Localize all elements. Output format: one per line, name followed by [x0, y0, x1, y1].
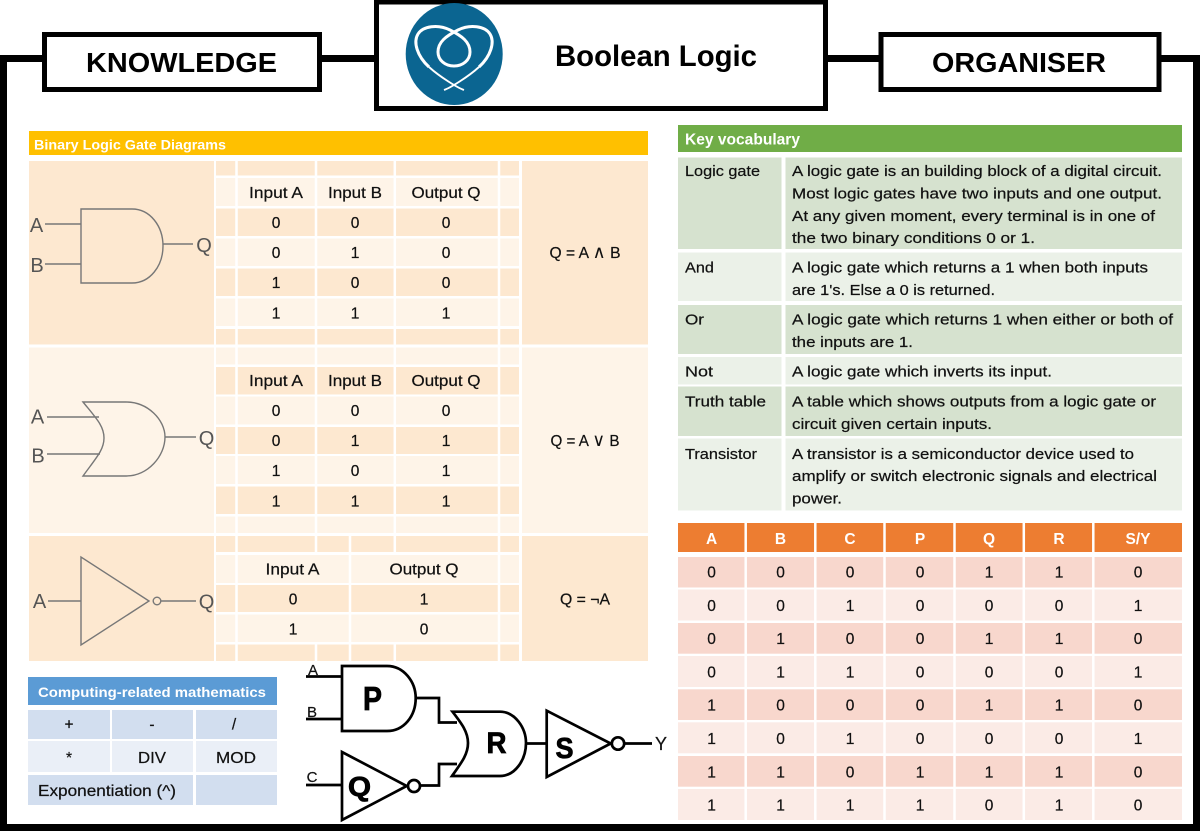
circuit diagram: S: [556, 733, 574, 765]
AND truth table: [216, 161, 519, 345]
title box: ORGANISER: [881, 34, 1159, 90]
heading: computing-related mathematics: Computing-related mathematics: [38, 684, 266, 700]
OR truth table: Input B: [328, 373, 382, 390]
truth table body: 1: [916, 764, 924, 782]
OR truth table: 1: [442, 494, 450, 510]
truth table body: 1: [846, 664, 854, 682]
term: or: the inputs are 1.: [792, 334, 913, 351]
title box: KNOWLEDGE: KNOWLEDGE: [86, 47, 277, 78]
row: NOT gate: [29, 536, 648, 661]
truth table body: 0: [776, 564, 785, 582]
truth table body: 1: [985, 698, 993, 714]
truth table body: 0: [846, 631, 855, 648]
AND truth table: 0: [351, 275, 360, 292]
truth table body: 1: [985, 631, 993, 648]
truth table body: 0: [846, 764, 855, 782]
truth table body: 1: [1055, 764, 1063, 782]
truth table body: 1: [776, 664, 785, 682]
AND truth table: 0: [442, 245, 451, 262]
OR truth table: 0: [272, 403, 281, 420]
AND truth table: 0: [351, 215, 360, 232]
icon: AND gate diagram: [30, 209, 212, 283]
OR truth table: 1: [272, 494, 280, 510]
truth table header row: R: [1053, 531, 1065, 548]
circuit diagram: C: [307, 769, 318, 786]
icon: OR gate diagram: [31, 402, 214, 476]
truth table body: 1: [707, 798, 716, 814]
truth table body: 0: [776, 598, 785, 615]
truth table body: 0: [1134, 631, 1143, 648]
truth table body: 1: [1055, 698, 1063, 714]
OR truth table: 0: [272, 433, 281, 450]
truth table body: 1: [846, 798, 854, 814]
icon: AND gate diagram: A: [30, 215, 44, 237]
term: transistor: power.: [792, 490, 842, 508]
term: truth table: Truth table: [685, 394, 766, 410]
truth table body: 1: [707, 764, 716, 782]
NOT truth table: Input A: [266, 562, 320, 578]
panel: computing-related mathematics: [28, 677, 277, 805]
truth table body: 0: [1134, 798, 1143, 814]
OR truth table: Input A: [249, 373, 304, 390]
operators grid: *: [66, 750, 72, 767]
formula: AND: Q = A ∧ B: [550, 242, 620, 262]
term: and: A logic gate which returns a 1 when both inputs: [792, 260, 1148, 276]
truth table body: 1: [1134, 598, 1142, 615]
icon: AND gate diagram: B: [30, 255, 44, 277]
OR truth table: 1: [351, 433, 359, 450]
term: transistor: amplify or switch electronic signals and electrical: [792, 468, 1157, 485]
icon: OR gate diagram: B: [31, 446, 45, 468]
AND truth table: 0: [442, 275, 451, 292]
term: transistor: A transistor is a semiconductor device used to: [792, 446, 1134, 463]
truth table body: 1: [985, 564, 993, 582]
OR truth table: Output Q: [412, 373, 480, 390]
truth table header row: A: [706, 531, 717, 548]
term: truth table: A table which shows outputs from a logic gate or: [792, 394, 1156, 410]
heading: binary logic gate diagrams: [29, 131, 648, 155]
truth table body: 1: [846, 598, 854, 615]
panel: key vocabulary: [678, 125, 1182, 510]
OR truth table: 1: [351, 494, 359, 510]
truth table body: 1: [707, 698, 716, 714]
main heading: Boolean Logic: [555, 40, 757, 73]
truth table body: 0: [1055, 664, 1064, 682]
truth table body: 1: [916, 798, 924, 814]
truth table body: 1: [776, 798, 785, 814]
truth table header row: Q: [983, 531, 995, 548]
truth table body: 0: [776, 731, 785, 748]
truth table body: 1: [1134, 731, 1142, 748]
truth table body: 0: [985, 731, 994, 748]
AND truth table: Input B: [328, 185, 382, 202]
truth table body: 1: [776, 631, 785, 648]
operators grid: Exponentiation (^): [38, 783, 176, 800]
panel: binary logic gate diagrams: [29, 131, 648, 661]
truth table header row: [678, 523, 1182, 552]
truth table body: 1: [846, 731, 854, 748]
NOT truth table: 1: [289, 622, 297, 638]
NOT truth table: Output Q: [390, 562, 458, 578]
term: logic gate: Logic gate: [685, 163, 760, 180]
term: logic gate: Most logic gates have two inputs and one output.: [792, 186, 1162, 202]
term: not: A logic gate which inverts its input.: [792, 364, 1052, 380]
term: logic gate: At any given moment, every terminal is in one of: [792, 208, 1156, 225]
OR truth table: 0: [351, 403, 360, 420]
title box: KNOWLEDGE: [44, 34, 320, 90]
circuit diagram: Y: [655, 734, 667, 754]
truth table body: 1: [707, 731, 716, 748]
truth table body: 0: [1055, 731, 1064, 748]
heading: key vocabulary: [678, 125, 1182, 152]
heading: binary logic gate diagrams: Binary Logic Gate Diagrams: [34, 136, 226, 152]
term: not: Not: [685, 364, 714, 380]
term: and: [678, 252, 1182, 301]
term: and: And: [685, 260, 714, 276]
AND truth table: 0: [272, 245, 281, 262]
truth table body: 0: [916, 598, 925, 615]
operators grid: /: [232, 716, 237, 734]
icon: NOT gate diagram: Q: [199, 592, 214, 614]
operators grid: +: [64, 716, 74, 734]
panel: circuit truth table: [678, 523, 1182, 820]
heading: key vocabulary: Key vocabulary: [685, 132, 800, 148]
truth table body: 0: [1134, 764, 1143, 782]
title box: Boolean Logic: [376, 2, 826, 108]
truth table body: 0: [707, 664, 716, 682]
term: or: [678, 305, 1182, 354]
row: AND gate: [29, 161, 648, 345]
truth table body: 0: [916, 564, 925, 582]
AND truth table: 0: [272, 215, 281, 232]
term: logic gate: the two binary conditions 0 or 1.: [792, 230, 1035, 247]
icon: NOT gate diagram: A: [33, 591, 47, 613]
circuit diagram: A: [308, 662, 318, 679]
truth table body: 0: [916, 631, 925, 648]
operators grid: [28, 710, 277, 805]
formula: NOT: Q = ¬A: [560, 592, 611, 608]
AND truth table: 1: [351, 306, 359, 322]
OR truth table: 0: [351, 463, 360, 480]
AND truth table: 1: [442, 306, 450, 322]
term: logic gate: A logic gate is an building block of a digital circuit.: [792, 163, 1162, 180]
title box: ORGANISER: ORGANISER: [932, 47, 1106, 78]
OR truth table: 0: [442, 403, 451, 420]
truth table body: 0: [985, 664, 994, 682]
circuit diagram: B: [307, 704, 317, 721]
term: truth table: [678, 386, 1182, 436]
truth table header row: B: [775, 531, 786, 548]
truth table body: 0: [985, 798, 994, 814]
truth table body: 0: [1134, 564, 1143, 582]
AND truth table: Input A: [249, 185, 304, 202]
icon: OR gate diagram: A: [31, 406, 45, 428]
term: or: Or: [685, 312, 704, 328]
truth table header row: P: [915, 531, 925, 548]
circuit diagram: [306, 662, 667, 820]
OR truth table: 1: [442, 463, 450, 480]
term: transistor: [678, 438, 1182, 510]
icon: OR gate diagram: Q: [199, 428, 214, 450]
term: logic gate: [678, 158, 1182, 249]
operators grid: MOD: [216, 750, 256, 767]
OR truth table: [216, 347, 519, 533]
truth table body: 0: [707, 564, 716, 582]
truth table body: 0: [916, 664, 925, 682]
operators grid: DIV: [138, 750, 167, 767]
truth table body: 1: [776, 764, 785, 782]
AND truth table: 1: [351, 245, 359, 262]
truth table body: 0: [846, 564, 855, 582]
truth table body: 0: [1055, 598, 1064, 615]
truth table body: [678, 523, 1182, 820]
circuit diagram: Q: [348, 771, 371, 802]
AND truth table: 1: [272, 306, 280, 322]
OR truth table: 1: [442, 433, 450, 450]
truth table body: 1: [985, 764, 993, 782]
operators grid: -: [149, 716, 155, 734]
icon: NOT gate diagram: [33, 557, 214, 645]
truth table body: 1: [1055, 564, 1063, 582]
truth table body: 0: [985, 598, 994, 615]
truth table body: 1: [1055, 798, 1063, 814]
formula: OR: Q = A ∨ B: [550, 430, 620, 450]
truth table body: 1: [1134, 664, 1142, 682]
AND truth table: Output Q: [412, 185, 480, 202]
heading: computing-related mathematics: [28, 677, 277, 705]
row: OR gate: [29, 347, 648, 533]
icon: AND gate diagram: Q: [196, 235, 212, 257]
truth table body: 0: [707, 598, 716, 615]
AND truth table: 1: [272, 275, 280, 292]
truth table body: 0: [707, 631, 716, 648]
term: transistor: Transistor: [685, 446, 757, 463]
NOT truth table: 0: [289, 592, 298, 608]
AND truth table: 0: [442, 215, 451, 232]
truth table body: 0: [1134, 698, 1143, 714]
truth table body: 0: [916, 698, 925, 714]
icon: school logo: [406, 3, 503, 105]
term: and: are 1's. Else a 0 is returned.: [792, 282, 995, 299]
truth table body: 0: [776, 698, 785, 714]
truth table header row: S/Y: [1126, 531, 1151, 548]
circuit diagram: P: [363, 680, 382, 717]
truth table body: 0: [916, 731, 925, 748]
NOT truth table: [216, 536, 519, 661]
NOT truth table: 1: [420, 592, 428, 608]
circuit diagram: R: [486, 727, 507, 760]
truth table body: 0: [846, 698, 855, 714]
term: or: A logic gate which returns 1 when either or both of: [792, 312, 1174, 328]
OR truth table: 1: [272, 463, 280, 480]
NOT truth table: 0: [420, 622, 429, 638]
truth table header row: C: [844, 531, 856, 548]
term: not: [678, 357, 1182, 384]
truth table body: 1: [1055, 631, 1063, 648]
term: truth table: circuit given certain inputs.: [792, 416, 992, 433]
